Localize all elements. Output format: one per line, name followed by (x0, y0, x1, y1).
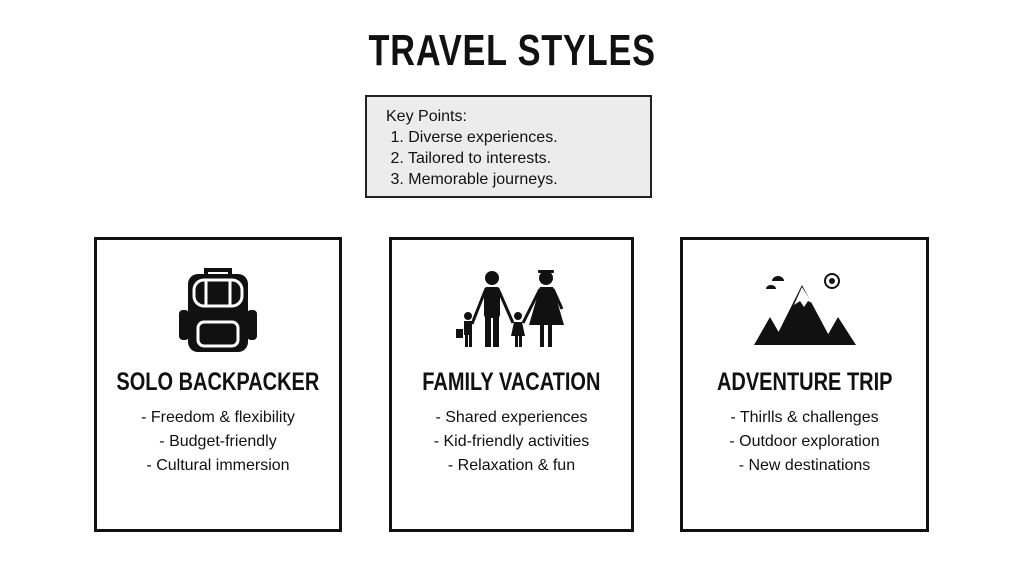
bullets (141, 409, 295, 474)
heading: FAMILY VACATION (422, 368, 601, 396)
panel: solo backpacker (94, 237, 342, 532)
key points box: 2. Tailored to interests. (390, 150, 551, 167)
heading: ADVENTURE TRIP (717, 368, 892, 396)
bullets (729, 409, 880, 474)
bullets: - Kid-friendly activities (434, 433, 589, 450)
bullets: - Budget-friendly (159, 433, 277, 450)
icon: mountains (754, 273, 856, 345)
key points box (365, 95, 652, 198)
key points box: 1. Diverse experiences. (390, 129, 558, 146)
bullets: - Thirlls & challenges (730, 409, 879, 426)
bullets: - Outdoor exploration (729, 433, 880, 450)
key points box: Key Points: (386, 108, 467, 125)
bullets: - Cultural immersion (146, 457, 290, 474)
heading: SOLO BACKPACKER (117, 368, 319, 396)
icon: family (456, 270, 564, 347)
panel: family vacation (389, 237, 634, 532)
bullets: - Relaxation & fun (448, 457, 575, 474)
bullets: - Shared experiences (435, 409, 588, 426)
bullets (434, 409, 589, 474)
icon: backpack (179, 268, 257, 352)
bullets: - Freedom & flexibility (141, 409, 295, 426)
title: TRAVEL STYLES (368, 26, 656, 75)
panel: adventure trip (680, 237, 929, 532)
bullets: - New destinations (739, 457, 870, 474)
key points box: 3. Memorable journeys. (390, 171, 558, 188)
